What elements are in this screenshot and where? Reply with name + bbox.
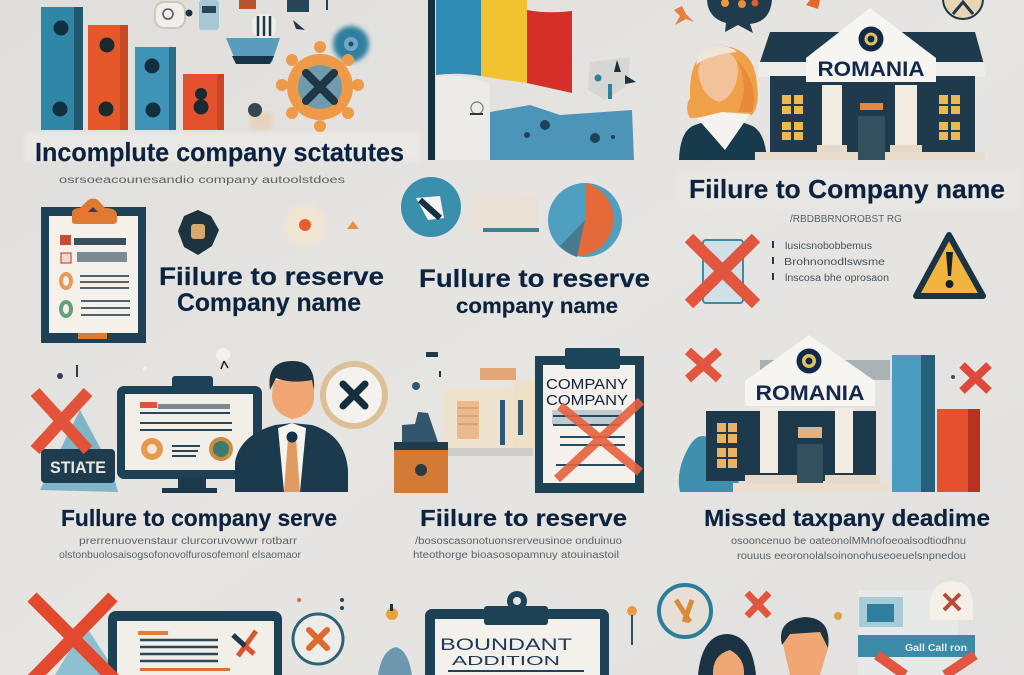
icon: speech bubble and small marks bbox=[674, 0, 983, 33]
caption: prerrenuovenstaur clurcoruvowwr rotbarr bbox=[79, 536, 298, 547]
icon: dark badge bbox=[178, 210, 219, 255]
icon: large red cross bbox=[32, 597, 115, 675]
heading: failure to company serve: Fullure to company serve bbox=[61, 505, 337, 531]
icon: state sign with cross bbox=[35, 392, 118, 492]
icon: flag bbox=[428, 0, 572, 160]
icon: blue skyline bbox=[490, 105, 634, 160]
bullet list: Brohnonodlswsme bbox=[784, 257, 886, 268]
icon: cross badge bbox=[320, 361, 388, 429]
heading: missed tax deadline: Missed taxpany deadime bbox=[704, 505, 990, 531]
panel: bottom right people bbox=[659, 581, 975, 675]
bullet list: lusicsnobobbemus bbox=[785, 241, 872, 252]
icon: small marks bbox=[57, 348, 230, 379]
panel: pie chart failure to reserve bbox=[401, 177, 650, 318]
heading: incomplete company statutes: Incomplute company sctatutes bbox=[35, 137, 404, 167]
panel: clipboard failure to reserve company name bbox=[41, 198, 384, 343]
icon: clipboard bbox=[425, 591, 609, 675]
icon: torn paper bbox=[470, 57, 636, 115]
bullet list bbox=[772, 241, 889, 284]
bullet list: lnscosa bhe oprosaon bbox=[785, 273, 889, 284]
icon: woman bbox=[698, 634, 756, 675]
pie chart bbox=[548, 183, 622, 257]
icon: monitor bbox=[108, 611, 282, 675]
panel: warning list bbox=[689, 235, 983, 304]
icon: businessman bbox=[235, 361, 348, 492]
icon: woman bbox=[679, 46, 767, 160]
heading: failure to reserve: Fiilure to reserve bbox=[159, 263, 384, 291]
icon: blue mountain bbox=[55, 625, 118, 675]
caption bbox=[413, 536, 622, 561]
heading: failure to reserve: Fiilure to reserve bbox=[420, 505, 627, 531]
heading: company name: Company name bbox=[177, 289, 361, 317]
icon: crossed document: COMPANY bbox=[546, 376, 628, 393]
icon: red crosses bbox=[688, 351, 989, 391]
caption bbox=[59, 536, 302, 561]
heading: failure to company name: Fiilure to Company name bbox=[689, 174, 1005, 204]
icon: circled symbol bbox=[659, 585, 711, 637]
icon: Romania building with bars: ROMANIA bbox=[756, 382, 864, 405]
icon: Romania building bbox=[755, 8, 985, 160]
icon: man bbox=[781, 617, 829, 675]
icon: state sign with cross: STIATE bbox=[50, 458, 106, 477]
icon: small top clutter bbox=[155, 0, 328, 64]
icon: gear with cross bbox=[276, 26, 369, 132]
caption bbox=[731, 536, 966, 562]
icon: pin bbox=[627, 606, 637, 645]
icon: red cross bbox=[689, 238, 756, 304]
icon: flower bbox=[284, 205, 359, 247]
panel: Romanian flag bbox=[428, 0, 636, 160]
icon: warning triangle bbox=[916, 235, 983, 296]
icon: clipboard: BOUNDANT bbox=[440, 635, 572, 654]
panel: company document failure to reserve bbox=[394, 348, 644, 561]
panel: missed tax deadline bbox=[679, 335, 990, 562]
icon: monitor bbox=[117, 376, 262, 493]
icon: binders bar chart bbox=[41, 7, 272, 130]
panel: incomplete company statutes bbox=[35, 0, 404, 186]
caption: osooncenuo be oateonolMMnofoeoalsodtiodhnu bbox=[731, 536, 966, 547]
caption: olstonbuolosaisogsofonovolfurosofemonl elsaomaor bbox=[59, 550, 302, 561]
caption: osrsoeacounesandio company autoolstdoes bbox=[59, 175, 345, 186]
icon: crossed document bbox=[535, 348, 644, 493]
panel: bottom left monitor bbox=[32, 597, 398, 675]
caption: /RBDBBRNOROBST RG bbox=[790, 214, 902, 225]
icon: clipboard bbox=[41, 198, 146, 343]
icon: small marks bbox=[297, 598, 398, 620]
panel: bottom centre clipboard bbox=[378, 591, 637, 675]
icon: blue circle bbox=[401, 177, 461, 237]
panel: failure to company serve bbox=[35, 348, 388, 561]
icon: Romania building: ROMANIA bbox=[818, 58, 924, 81]
icon: faded bar bbox=[473, 195, 539, 233]
icon: document with cross: Gall Call ron bbox=[905, 643, 967, 654]
icon: clipboard: ADDITION bbox=[452, 653, 560, 668]
heading: failure to reserve: Fullure to reserve bbox=[419, 265, 650, 293]
caption: rouuus eeoronolalsoinonohuseoeuelsnpnedou bbox=[737, 551, 966, 562]
caption: /bososcasonotuonsrerveusinoe onduinuo bbox=[415, 536, 622, 547]
icon: small figure bbox=[378, 647, 412, 675]
icon: red cross bbox=[747, 593, 769, 616]
icon: circled cross bbox=[293, 614, 343, 664]
icon: crossed document: COMPANY bbox=[546, 392, 628, 409]
caption: hteothorge bioasosopamnuy atouinastoil bbox=[413, 550, 619, 561]
heading: company name: company name bbox=[456, 295, 618, 318]
icon: document with cross bbox=[834, 581, 975, 675]
icon: office shelves bbox=[394, 352, 535, 493]
panel: woman and Romania building bbox=[674, 0, 1005, 225]
icon: Romania building with bars bbox=[679, 335, 980, 492]
